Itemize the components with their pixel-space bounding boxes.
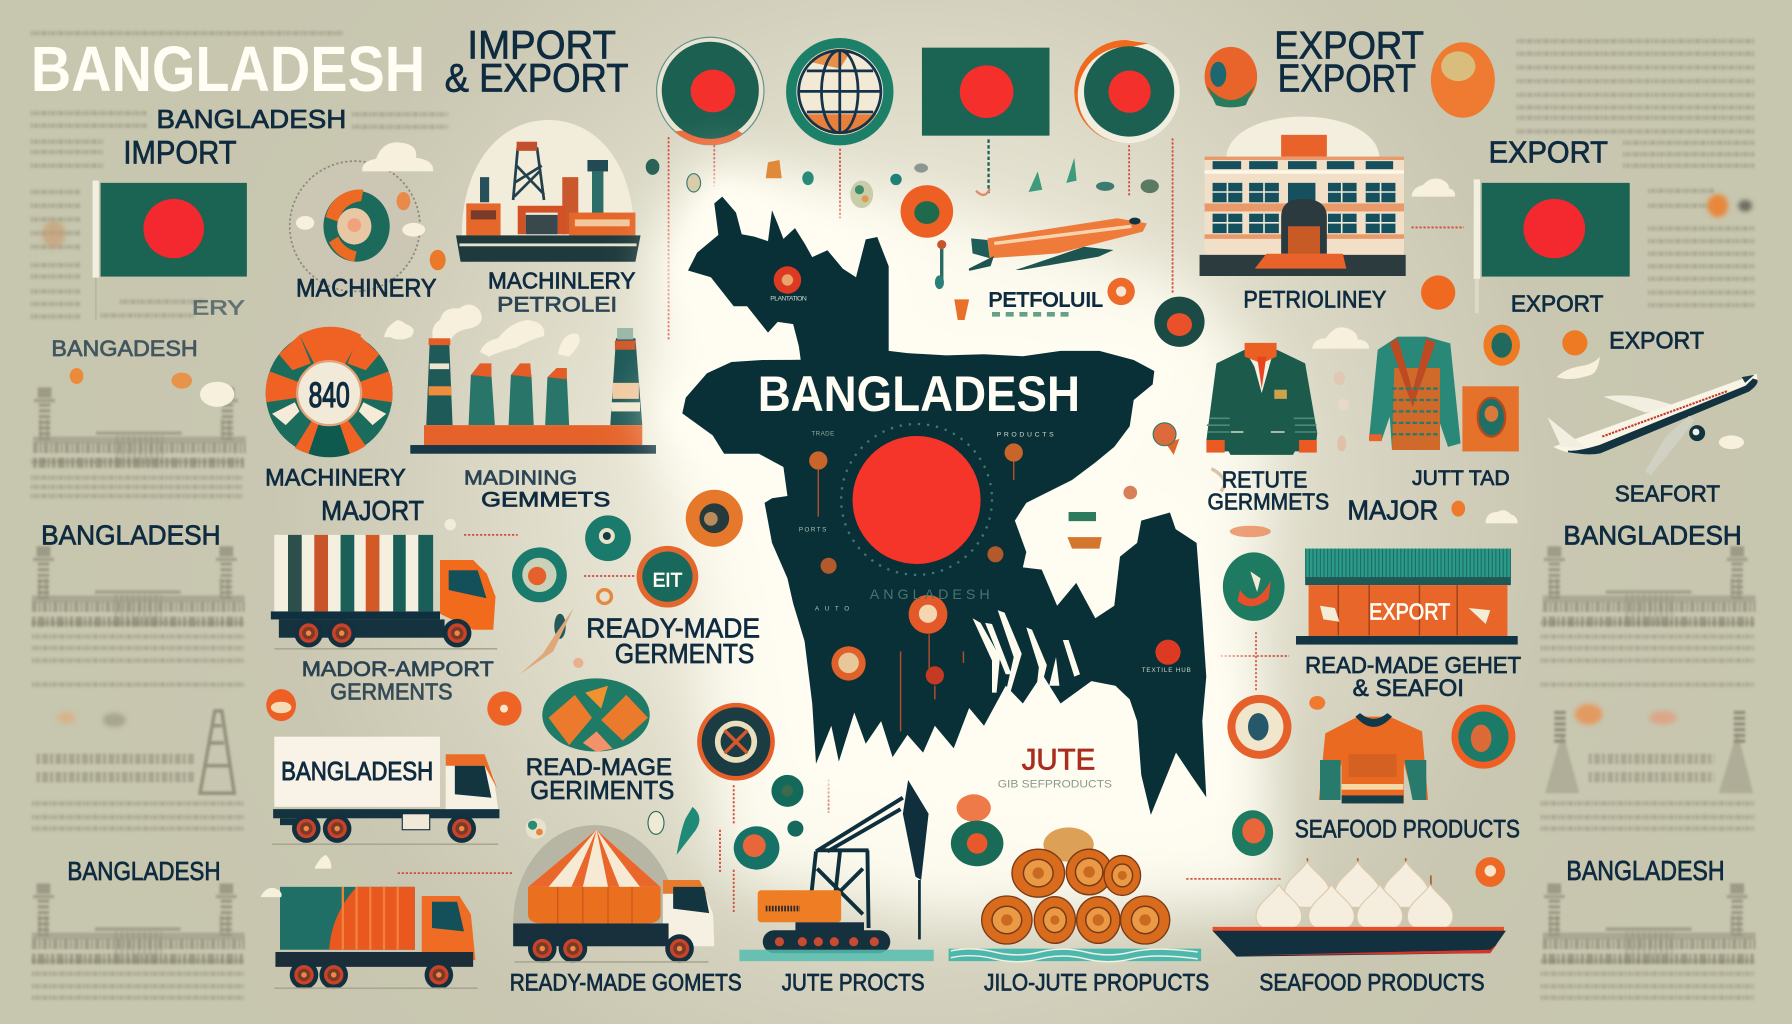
labels right side: GERMMETS — [1208, 488, 1329, 514]
labels right side: PETRIOLINEY — [1243, 286, 1386, 313]
orange egg — [430, 250, 446, 270]
right flag — [1474, 179, 1630, 313]
small badges: right — [1205, 42, 1587, 887]
labels right side: RETUTE — [1222, 466, 1307, 492]
factory chimneys — [384, 305, 656, 454]
orange bag — [1462, 386, 1519, 451]
labels inner left: PETFOLUIL — [989, 289, 1103, 311]
labels right side: & SEAFOI — [1353, 675, 1464, 702]
labels left column: ERY — [192, 296, 245, 319]
labels right side — [1208, 24, 1742, 886]
subtitle import: IMPORT — [467, 23, 616, 67]
small badges: left and centre — [266, 159, 1205, 870]
faint placeholder text blocks left — [31, 33, 448, 998]
labels inner left: MAJORT — [321, 495, 424, 526]
labels inner left: READY-MADE — [586, 613, 760, 644]
lifebuoy badge — [266, 327, 393, 457]
labels right side: EXPORT — [1511, 291, 1603, 317]
small plane icon — [969, 218, 1147, 270]
smudges in ghost panels — [42, 194, 1752, 727]
truck: Bangladesh white — [272, 737, 499, 845]
truck: green orange — [274, 887, 478, 989]
tiny map captions: AUTO — [815, 605, 849, 612]
tiny map captions: TRADE — [811, 430, 834, 437]
icon: machinery gear — [290, 161, 425, 291]
patterned ball — [542, 678, 650, 752]
red dashed connector lines — [398, 137, 1464, 912]
labels left column: BANGADESH — [51, 336, 198, 361]
labels right side: EXPORT — [1274, 24, 1424, 67]
map small markers — [774, 266, 1181, 731]
labels right side: SEAFOOD PRODUCTS — [1295, 815, 1520, 843]
tiny map captions: PRODUCTS — [997, 432, 1054, 439]
school building — [1200, 117, 1406, 276]
labels bottom row: READY-MADE GOMETS — [510, 970, 742, 997]
cloud — [1719, 435, 1744, 449]
labels left column — [41, 106, 346, 886]
subtitle and export: & EXPORT — [445, 56, 629, 100]
labels right side: BANGLADESH — [1563, 520, 1742, 550]
labels left column: BANGLADESH — [41, 520, 221, 551]
truck label: BANGLADESH — [281, 756, 433, 786]
labels right side: BANGLADESH — [1566, 855, 1725, 886]
labels inner left: GERIMENTS — [530, 775, 674, 805]
labels bottom row: SEAFOOD PRODUCTS — [1259, 970, 1485, 997]
dashed ring — [841, 424, 992, 575]
labels inner left: GERMENTS — [330, 678, 453, 704]
export shed — [1296, 549, 1518, 645]
labels inner left: GEMMETS — [481, 488, 610, 511]
cloud — [1557, 357, 1600, 379]
truck: striped — [271, 535, 497, 650]
jute sublabel: GIB SEFPRODUCTS — [998, 778, 1112, 790]
airplane — [1547, 374, 1757, 473]
cardigan — [1369, 337, 1461, 450]
cloud — [1411, 178, 1455, 197]
labels inner left: MACHINERY — [265, 465, 406, 492]
red sun — [853, 436, 981, 564]
ghost buildings — [32, 387, 1755, 959]
tiny map captions — [770, 296, 1191, 674]
labels inner left: MACHINERY — [296, 275, 437, 303]
Bangladesh map — [682, 197, 1206, 815]
cloud — [362, 142, 433, 171]
labels right side: READ-MADE GEHET — [1305, 652, 1521, 678]
shed label: EXPORT — [1369, 598, 1450, 624]
center map title: BANGLADESH — [758, 365, 1080, 422]
labels right side: JUTT TAD — [1412, 465, 1510, 490]
oil rig excavator — [739, 780, 934, 961]
small clouds left — [70, 323, 414, 897]
labels right side: EXPORT — [1609, 328, 1704, 355]
labels left column: IMPORT — [123, 134, 237, 170]
labels inner left: MADOR-AMPORT — [302, 656, 494, 681]
tiny map captions: PLANTATION — [770, 296, 807, 303]
glow behind map — [682, 197, 1207, 815]
labels left column: BANGLADESH — [157, 106, 346, 134]
flag circle 4 — [1074, 40, 1180, 143]
delta rivers — [973, 610, 1080, 697]
left flag — [93, 181, 247, 320]
ship with bales — [1213, 858, 1506, 957]
faint placeholder text blocks right — [1517, 41, 1754, 998]
small badges: left and centre: EIT — [653, 569, 682, 591]
labels right side: MAJOR — [1347, 494, 1438, 525]
faint map word: ANGLADESH — [870, 587, 990, 603]
labels inner left — [265, 267, 1103, 805]
labels right side: SEAFORT — [1615, 481, 1720, 507]
badge number: 840 — [309, 375, 350, 415]
jute bales — [949, 827, 1201, 962]
red JUTE label: JUTE — [1022, 744, 1095, 777]
refinery on barge — [456, 120, 641, 262]
cloud — [1312, 327, 1369, 349]
labels bottom row: JUTE PROCTS — [782, 970, 925, 997]
labels inner left: READ-MAGE — [526, 754, 672, 781]
labels right side: EXPORT — [1489, 134, 1608, 169]
orange shirt — [1319, 713, 1428, 803]
labels right side: EXPORT — [1278, 57, 1416, 100]
labels bottom row: JILO-JUTE PROPUCTS — [984, 970, 1209, 997]
tiny map captions: PORTS — [799, 526, 826, 533]
tiny scattered icons — [314, 158, 1349, 869]
jacket — [1206, 343, 1317, 455]
labels inner left: PETROLEI — [497, 294, 617, 317]
flag circle 1 — [657, 37, 764, 145]
labels bottom row — [510, 970, 1485, 997]
flag top center — [922, 48, 1049, 136]
truck: tent cargo — [513, 825, 714, 963]
tiny map captions: TEXTILE HUB — [1142, 667, 1191, 674]
labels inner left: MADINING — [464, 467, 577, 490]
pieces in glow — [951, 423, 1225, 866]
labels left column: BANGLADESH — [67, 856, 221, 886]
labels inner left: MACHINLERY — [488, 267, 635, 293]
globe badge — [786, 38, 893, 145]
labels inner left: GERMENTS — [615, 638, 754, 669]
title: BANGLADESH — [31, 33, 425, 105]
